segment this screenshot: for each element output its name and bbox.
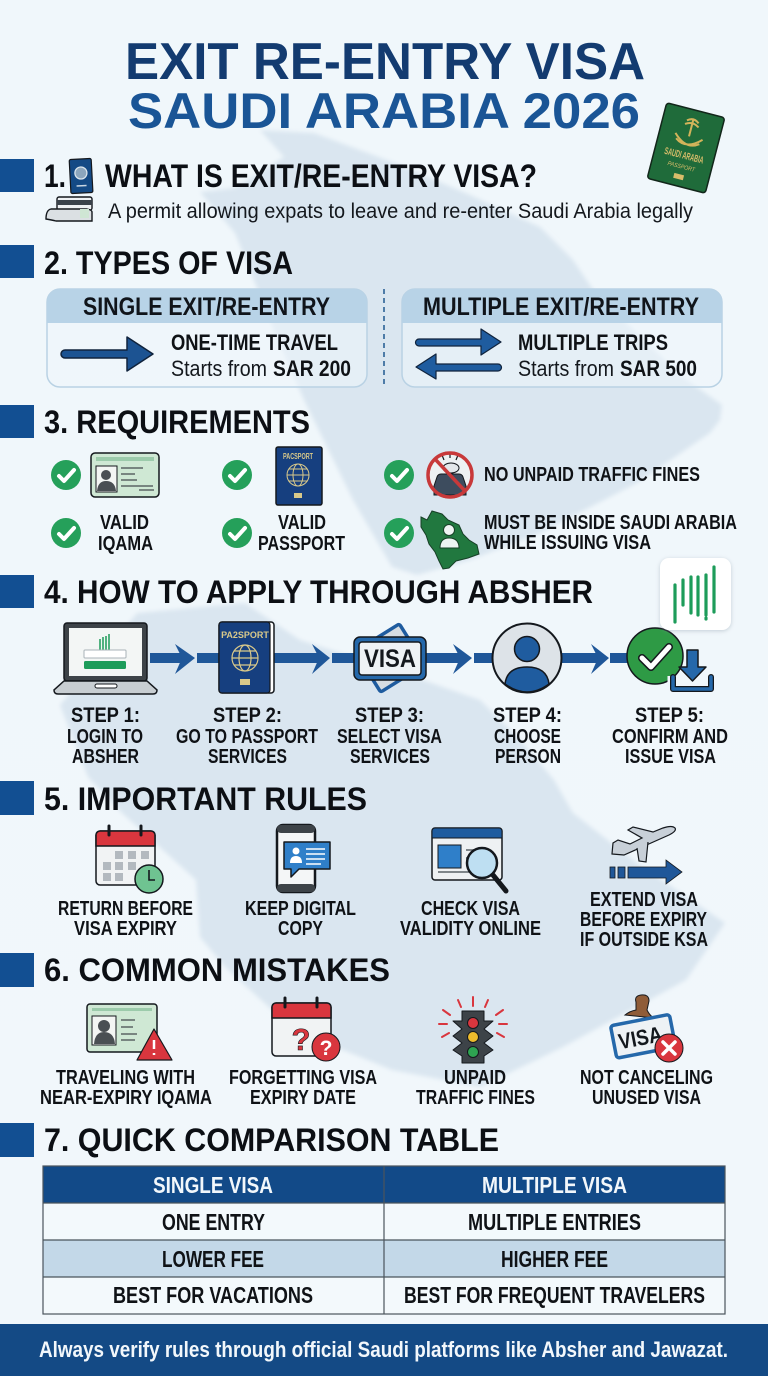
- icon: small blue passport: [69, 158, 93, 194]
- heading 5: 5. IMPORTANT RULES: [44, 781, 367, 817]
- arrows: two way: [416, 329, 502, 379]
- section 6: common mistakes: [0, 952, 713, 1109]
- panel: single exit/re-entry: SINGLE EXIT/RE-ENTRY: [83, 293, 330, 321]
- mistake 4 text: UNUSED VISA: [592, 1087, 701, 1109]
- step 5 text: STEP 5:: [635, 704, 704, 727]
- icon: passport step: [219, 622, 274, 693]
- icon: confirm and download: [627, 628, 712, 689]
- arrow: one way: [61, 337, 153, 371]
- step 2 text: GO TO PASSPORT: [176, 726, 318, 748]
- comparison table: BEST FOR VACATIONS: [113, 1282, 313, 1308]
- heading 7: 7. QUICK COMPARISON TABLE: [44, 1122, 499, 1158]
- mistake 3 text: TRAFFIC FINES: [416, 1087, 535, 1109]
- mistake 3 text: UNPAID: [444, 1067, 506, 1089]
- section 7: quick comparison table: [0, 1122, 725, 1314]
- icon: person step: [492, 624, 562, 692]
- footer banner: [0, 1324, 768, 1376]
- icon: laptop: [54, 623, 157, 694]
- step 4 text: [493, 704, 562, 768]
- comparison table: MULTIPLE VISA: [482, 1172, 627, 1198]
- must be inside label: [484, 512, 737, 554]
- icon: check marks: [51, 460, 414, 548]
- mistake 2 text: FORGETTING VISA: [229, 1067, 377, 1089]
- step 1 text: ABSHER: [72, 746, 139, 768]
- panel: multiple exit/re-entry: MULTIPLE EXIT/RE-ENTRY: [423, 293, 699, 321]
- icon: Absher logo tile: [660, 558, 731, 630]
- panel: single exit/re-entry: ONE-TIME TRAVEL: [171, 330, 338, 355]
- icon: green Saudi passport: SAUDI ARABIA: [663, 146, 705, 167]
- step 5 text: ISSUE VISA: [625, 746, 716, 768]
- mistake 1 text: NEAR-EXPIRY IQAMA: [40, 1087, 212, 1109]
- panel: single exit/re-entry: Starts from: [171, 356, 267, 381]
- icon: calendar with clock: [96, 826, 163, 893]
- icon: green Saudi passport: PASSPORT: [667, 161, 696, 174]
- rule 3 text: CHECK VISA: [421, 898, 520, 920]
- heading 6: 6. COMMON MISTAKES: [44, 952, 390, 988]
- step 5 text: CONFIRM AND: [612, 726, 728, 748]
- section marker 1: [0, 159, 34, 192]
- heading 2: 2. TYPES OF VISA: [44, 245, 293, 281]
- step 3 text: STEP 3:: [355, 704, 424, 727]
- icon: calendar with question: ?: [320, 1037, 332, 1060]
- icon: passport step: PA2SPORT: [221, 630, 269, 640]
- mistake 1 text: [40, 1067, 212, 1109]
- iqama label: IQAMA: [98, 533, 153, 555]
- heading 4: 4. HOW TO APPLY THROUGH ABSHER: [44, 574, 593, 610]
- mistake 4 text: NOT CANCELING: [580, 1067, 713, 1089]
- must be inside label: WHILE ISSUING VISA: [484, 532, 651, 554]
- step 5 text: [612, 704, 728, 768]
- rule 4 text: [580, 889, 708, 951]
- icon: green Saudi passport: [647, 103, 725, 193]
- panel: single exit/re-entry: SAR 200: [273, 356, 351, 381]
- heading 3: 3. REQUIREMENTS: [44, 404, 310, 440]
- icon: traffic light: [439, 997, 507, 1063]
- step 1 text: LOGIN TO: [67, 726, 143, 748]
- divider: [383, 289, 385, 387]
- step 4 text: PERSON: [495, 746, 561, 768]
- valid label: VALID: [278, 512, 326, 534]
- section marker 3: [0, 405, 34, 438]
- step 2 text: SERVICES: [208, 746, 287, 768]
- comparison table: HIGHER FEE: [501, 1246, 608, 1272]
- step 1 text: STEP 1:: [71, 704, 140, 727]
- icon: unused visa stamp: [610, 995, 683, 1062]
- comparison table: SINGLE VISA: [153, 1172, 273, 1198]
- icon: browser with magnifier: [432, 828, 506, 891]
- passport label: PASSPORT: [258, 533, 345, 555]
- requirement labels: VALID: [100, 512, 149, 534]
- section marker 2: [0, 245, 34, 278]
- icon: printed ticket: [46, 197, 92, 221]
- section marker 4: [0, 575, 34, 608]
- step 2 text: STEP 2:: [213, 704, 282, 727]
- panel: multiple exit/re-entry: Starts from: [518, 356, 614, 381]
- icon: calendar with question: [272, 998, 340, 1061]
- section 1: what is exit/re-entry visa: [0, 158, 693, 223]
- rule 4 text: BEFORE EXPIRY: [580, 909, 708, 931]
- description text: A permit allowing expats to leave and re-enter Saudi Arabia legally: [108, 200, 693, 223]
- step 4 text: STEP 4:: [493, 704, 562, 727]
- section 5: important rules: [0, 781, 708, 951]
- step 2 text: [176, 704, 318, 768]
- icon: Saudi map with person: [421, 511, 479, 569]
- icon: unused visa stamp: VISA: [616, 1021, 664, 1054]
- rule 2 text: [245, 898, 356, 940]
- icon: blue passport: PACSPORT: [283, 452, 313, 461]
- process arrows: [150, 644, 632, 674]
- rule 3 text: [400, 898, 541, 940]
- icon: no traffic fines: [427, 452, 473, 498]
- step 3 text: [337, 704, 442, 768]
- comparison table: MULTIPLE ENTRIES: [468, 1209, 641, 1235]
- icon: iqama card: [91, 453, 159, 497]
- rule 1 text: [58, 898, 193, 940]
- section 2: types of visa: [0, 245, 722, 387]
- step 3 text: SELECT VISA: [337, 726, 442, 748]
- section marker 5: [0, 781, 34, 815]
- no unpaid fines label: NO UNPAID TRAFFIC FINES: [484, 464, 700, 486]
- panel: single exit/re-entry: [47, 289, 367, 387]
- comparison table: ONE ENTRY: [162, 1209, 265, 1235]
- heading 1 number: 1.: [44, 158, 66, 194]
- rule 4 text: IF OUTSIDE KSA: [580, 929, 708, 951]
- title: SAUDI ARABIA 2026: [128, 83, 640, 139]
- panel: multiple exit/re-entry: SAR 500: [620, 356, 697, 381]
- mistake 3 text: [416, 1067, 535, 1109]
- step 3 text: SERVICES: [350, 746, 430, 768]
- rule 2 text: COPY: [278, 918, 324, 940]
- icon: airplane and arrow: [610, 826, 682, 884]
- mistake 2 text: EXPIRY DATE: [250, 1087, 356, 1109]
- mistake 1 text: TRAVELING WITH: [56, 1067, 195, 1089]
- panel: multiple exit/re-entry: MULTIPLE TRIPS: [518, 330, 668, 355]
- rule 1 text: VISA EXPIRY: [74, 918, 178, 940]
- panel: multiple exit/re-entry: [402, 289, 722, 387]
- section marker 6: [0, 953, 34, 987]
- rule 3 text: VALIDITY ONLINE: [400, 918, 541, 940]
- section marker 7: [0, 1123, 34, 1157]
- mistake 4 text: [580, 1067, 713, 1109]
- heading 1: WHAT IS EXIT/RE-ENTRY VISA?: [105, 158, 537, 194]
- step 4 text: CHOOSE: [494, 726, 561, 748]
- icon: visa card step: [354, 624, 426, 692]
- step 1 text: [67, 704, 143, 768]
- icon: calendar with question: ?: [292, 1022, 310, 1057]
- rule 4 text: EXTEND VISA: [590, 889, 698, 911]
- icon: phone with digital copy: [277, 825, 330, 892]
- title: [125, 33, 645, 139]
- comparison table: [43, 1166, 725, 1314]
- rule 2 text: KEEP DIGITAL: [245, 898, 356, 920]
- comparison table: LOWER FEE: [162, 1246, 264, 1272]
- icon: iqama with warning: [87, 1004, 172, 1060]
- section 4: how to apply through Absher: [0, 558, 731, 768]
- title: EXIT RE-ENTRY VISA: [125, 33, 645, 91]
- icon: blue passport: [276, 447, 322, 505]
- rule 1 text: RETURN BEFORE: [58, 898, 193, 920]
- icon: visa card step: VISA: [364, 645, 416, 673]
- section 3: requirements: [0, 404, 737, 569]
- mistake 2 text: [229, 1067, 377, 1109]
